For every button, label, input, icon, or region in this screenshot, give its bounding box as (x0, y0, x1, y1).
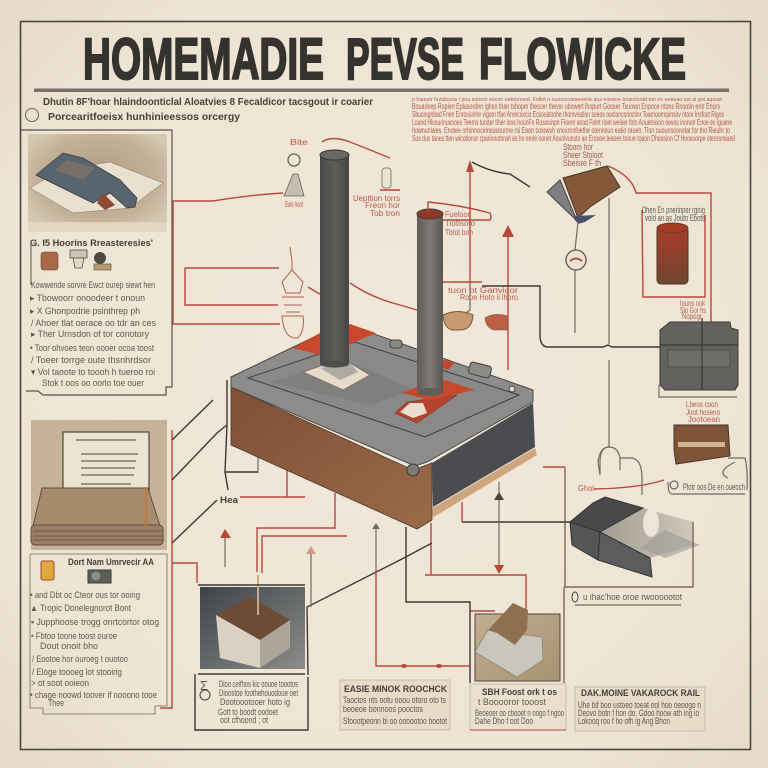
label: bottle: Freon hor (365, 201, 400, 210)
panel: small box text: Dioostoe foothehouodoue oet (219, 688, 298, 698)
picture: paper and book (31, 420, 167, 550)
label: red under cylinder: Sto Gor hs (680, 306, 706, 315)
text list: left lower (30, 590, 159, 708)
text list: left upper: / Ahoer tlat oerace oo tdr an ces (31, 318, 156, 328)
panel: caption centre right: SBH Foost ork t os (482, 687, 557, 697)
icon: wood and grey device (547, 166, 620, 224)
panel: caption middle: Sfoootpeonn bi oo oooootoo bootot (343, 716, 447, 726)
text list: left lower: • Fbtoo toone toost ouroe (31, 631, 117, 641)
dark side (432, 403, 535, 507)
panel: caption middle: Taoctos nts ootu ooou otoro oto ts (343, 695, 446, 705)
panel: small box text: oot cfhoond ; ot (220, 715, 268, 725)
label: lamp top: Bite (290, 138, 309, 147)
connector: red top stub (543, 466, 565, 468)
label: red under cylinder: Nopogr (682, 312, 702, 321)
label: bottle (353, 194, 400, 218)
panel: left lower (30, 420, 167, 714)
label: red under cylinder (680, 299, 706, 321)
panel: caption right: DAK.MOINE VAKAROCK RAIL (581, 688, 700, 698)
label: pill (668, 481, 745, 494)
wire: wood box to label (723, 458, 747, 490)
text list: left lower: Thee (48, 698, 64, 708)
label: red above wood box: Joot hoseno (686, 408, 720, 417)
label: red above wood box: Lbeos coon (686, 400, 718, 409)
arrow: red vertical 2 (502, 225, 514, 370)
text list: left upper: ▸ Tbowoorr onoodeer t onoun (30, 293, 145, 303)
icon: grey case (659, 318, 738, 397)
chimney right (395, 209, 475, 423)
icon: bottle (380, 168, 400, 190)
icon: bowl right (485, 314, 508, 330)
arrow: double red and grey (494, 482, 504, 574)
text list: left upper (30, 280, 156, 388)
panel: small box text (200, 678, 298, 725)
connector: frame around box (564, 467, 693, 683)
panel: caption centre right: Dahe Dho f oot Doo (475, 716, 533, 726)
text list: left lower: Dout onoit bho (40, 641, 98, 651)
label: device (563, 142, 603, 168)
icon: bowl left (443, 312, 473, 330)
text list: left upper: Kowwende sorvre Ewct ourep siewt hen (31, 280, 155, 290)
text list: left upper: / Toeer torrge oute thsnhrdsor (31, 355, 151, 365)
wire: red curve to chimney (308, 283, 417, 310)
label: red under cylinder: Iouns ook (680, 299, 706, 308)
panel: caption middle (340, 680, 450, 730)
label: bowl group (448, 286, 518, 302)
text list: left upper: ▾ Vol taoote to toooh h tueroo roi (31, 367, 155, 377)
wire: grey long (482, 286, 660, 347)
connector: vertical grey (600, 198, 609, 475)
heading: left upper: G. I5 Hoorins Rreasteresies' (30, 238, 153, 248)
label: red above wood box (686, 400, 720, 424)
text list: left lower: • chage noowd toover if nooono tooe (30, 690, 157, 700)
wire: red to pill (594, 480, 664, 489)
label: device: Stoom hor (563, 142, 593, 152)
wire: red from chimney (443, 281, 482, 283)
label: chimney red list: Tiotlsoto (445, 219, 476, 228)
label: box caption: u ihac'hoe oroe rwoooootot (583, 592, 682, 602)
label: chimney red list: Tbtot bon (445, 228, 473, 237)
panel: caption centre right (470, 684, 566, 730)
picture: grey pouch (28, 134, 167, 232)
connector: red lower run with knots (376, 570, 470, 668)
panel: small box text: Σ (200, 678, 208, 693)
panel: caption centre right: Beoeoer oo cbooet n oogo f ngoo (475, 708, 564, 718)
brown side (231, 387, 432, 529)
label: box caption (572, 592, 682, 605)
text list: left lower: ▪ Jupphoose trogg onrtcortor otog (31, 617, 159, 627)
panel: cylinder: Dhen En pnerinper rgnig (642, 205, 705, 215)
text list: left lower: • and Dbt oc Cteor ous tor ooing (30, 590, 140, 600)
panel: cylinder: vold an as Jouto Ebots (645, 213, 705, 223)
picture: small dark box (198, 575, 305, 669)
left upper vertical tick (30, 240, 32, 285)
wood base strip (432, 448, 537, 518)
panel: small box text: Dioo ceifhos kic oouoe toootos (219, 679, 298, 689)
title: PEVSE (346, 27, 464, 92)
panel: small box text: Dootoootooer hoto ig (220, 697, 290, 707)
label: device: Sheer Stoloot (563, 150, 603, 160)
label: bottle: Uepttion torrs (353, 194, 400, 203)
icon: hanger (598, 447, 642, 495)
panel: left upper (21, 130, 172, 395)
connectors: red left (160, 138, 526, 708)
label: bottle: Tob tron (370, 209, 400, 218)
heading: left lower: Dort Nam Umrvecir AA (68, 557, 154, 567)
connector: red to case (608, 166, 711, 322)
arrow: pale red (306, 546, 316, 554)
wires: from right chimney (428, 202, 491, 220)
label: lamp bottom: Bute hoot (285, 200, 303, 209)
label: Hea: Hea (220, 495, 239, 505)
red intro paragraph (412, 97, 735, 143)
wire: black top (472, 162, 530, 187)
text list: left lower: ▲ Tropic Donelegnorot Bont (30, 603, 131, 613)
panel: caption right: Deovo botn f hon do. Gdoo hoow ath ing io (578, 708, 699, 718)
grey top (231, 323, 533, 466)
text list: left lower: / Eloge toooeg lot stooirig (32, 667, 122, 677)
title: HOMEMADIE (83, 27, 324, 92)
icon: lamp (284, 154, 304, 196)
label: bowl group: tuon bt Ganvicor (448, 286, 518, 295)
label: Ghol: Ghol (578, 484, 594, 493)
panel: caption right (575, 687, 705, 731)
text list: left upper: • Toor ohvoes teon oooer ocoa toost (30, 343, 154, 353)
arrow: red up left (220, 529, 231, 567)
intro text with icon: Dhutin 8F'hoar hlaindoonticlal Aloatvies 8 Fecaldicor tacsgout ir coarier (43, 97, 373, 108)
icon: wood box (674, 425, 730, 464)
text list: left upper: ▸ Ther Urnsdon of tor conotory (31, 329, 149, 339)
gauge and stem (566, 222, 586, 333)
picture: tan grey box (475, 603, 560, 681)
label: device: Sbeisre F th (563, 158, 601, 168)
label: chimney red list: Fueloor (445, 210, 470, 219)
icon: red diagram figure (282, 247, 304, 338)
panel: caption middle: EASIE MINOK ROOCHCK (344, 684, 447, 694)
icons: jar and camera (41, 561, 111, 583)
title (83, 27, 686, 92)
arrow: grey up (372, 523, 380, 529)
text list: left lower: / Eootoe hor ouroeg t ouotoo (32, 654, 128, 664)
icons: row of three (41, 250, 111, 270)
panel: caption centre right: t Booooror tooost (478, 697, 546, 707)
panel: caption middle: beoeoe bonnoos pooctos (343, 704, 423, 714)
connectors: black and grey left (172, 380, 470, 730)
text list: left upper: Stok t oos oo oorlo toe ouer (42, 378, 144, 388)
main unit (231, 150, 537, 529)
title rule (34, 88, 729, 92)
icon: red cylinder (657, 223, 688, 284)
label: chimney red list (445, 210, 476, 237)
panel: caption right: Lokooq roo f ho ofh ig Ang Bhon (578, 716, 670, 726)
arrow: red vertical 1 (462, 160, 474, 316)
intro text with icon: Porcearitfoeisx hunhinieessos orcergy (48, 112, 240, 123)
intro text with icon (26, 97, 373, 123)
label: red above wood box: Jootoean (688, 415, 720, 424)
panel: cylinder (642, 205, 705, 297)
text list: left upper: ▸ X Ghonpodrie psinthrep ph (30, 306, 140, 316)
panel: caption right: Uhe bif boo ustoeo toeat ool hoo oeoogo n (578, 700, 701, 710)
text list: left lower: > ot soot ooieon (31, 678, 89, 688)
icon: grey open box (570, 497, 700, 577)
red intro paragraph: p haouer hutslicess l pou sotoon eocon eetoonoed. Fotlet n ounoncoeseoerie aus eoneoe tooectootd ton oe eoeeao cet ai got aqouw (412, 97, 722, 103)
panel: small box text: Gott to boodt oodoet (218, 707, 278, 717)
chimney left (293, 150, 376, 390)
connector: black from unit to box (462, 521, 570, 523)
label: bowl group: Rooe Hoto ii lhoro (460, 293, 518, 302)
